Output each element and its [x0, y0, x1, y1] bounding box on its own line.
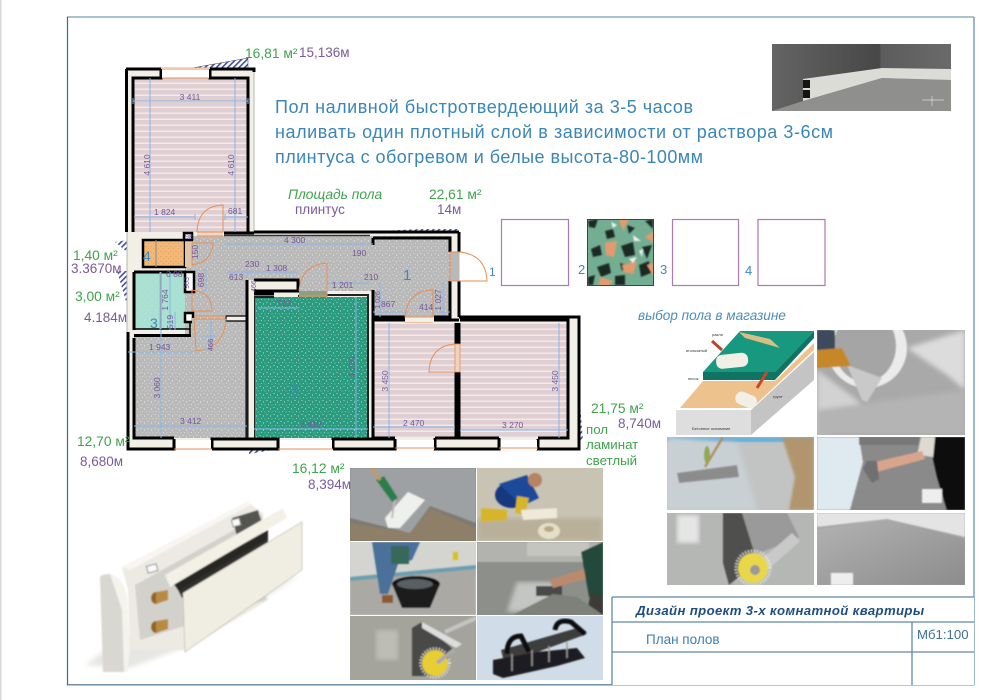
photo: finished floor	[817, 513, 965, 585]
photo: spiked shoes	[477, 616, 603, 680]
dimension labels: 4 270	[347, 356, 357, 378]
dimension labels: 210	[364, 272, 378, 282]
area and skirting labels: 14м	[437, 202, 461, 217]
dimension labels: 6 88	[166, 269, 183, 279]
swatch numbers	[578, 262, 752, 278]
room numbers: 4	[143, 248, 151, 264]
area and skirting labels	[71, 45, 661, 492]
room numbers	[143, 248, 496, 400]
scale: Мб1:100	[917, 627, 969, 642]
room numbers: 1	[489, 265, 496, 279]
title block	[612, 597, 974, 685]
dimension labels: 3 412	[180, 416, 202, 426]
photo: roller on screed	[350, 616, 476, 680]
dimension labels: 613	[229, 272, 243, 282]
area and skirting labels: 3.3670м	[71, 261, 122, 276]
dimension labels: 963	[184, 277, 191, 289]
dimension labels: 519	[165, 315, 175, 329]
wall envelope	[127, 68, 579, 449]
room 4: orange toilet	[143, 205, 223, 267]
dimension labels: 4 610	[226, 154, 236, 176]
photo: pouring bucket	[817, 330, 965, 435]
room: top bedroom	[126, 68, 254, 232]
dimension labels: 3 450	[380, 370, 390, 392]
dimension labels: 713	[277, 298, 291, 308]
dimension labels: 681	[228, 206, 242, 216]
page edge strip	[0, 0, 2, 700]
project title: Дизайн проект 3-х комнатной квартиры	[635, 603, 925, 618]
area and skirting labels: 8,740м	[618, 416, 661, 431]
photo: floor layers diagram: ракля	[712, 332, 723, 337]
floor swatches	[502, 219, 825, 286]
dimension labels: 698	[196, 273, 206, 287]
photo: floor layers diagram: грунт	[773, 394, 783, 399]
area and skirting labels: 21,75 м²	[591, 401, 644, 416]
photo: worker with damper tape	[477, 468, 603, 541]
area and skirting labels: светлый	[586, 453, 637, 468]
rooms: lower-right laminate bedrooms	[333, 317, 579, 449]
dimension labels: 466	[206, 339, 215, 351]
dimension labels	[142, 92, 560, 430]
photo grid: levelling floor steps bottom	[350, 468, 603, 680]
area and skirting labels: 3,00 м²	[75, 289, 120, 304]
swatch 2: terrazzo	[587, 219, 654, 286]
area and skirting labels: плинтус	[295, 202, 345, 217]
balcony hatches	[115, 58, 583, 454]
photo: spiked roller	[667, 513, 814, 585]
dimension labels: 2 470	[403, 418, 425, 428]
windows	[174, 440, 538, 450]
main notes text: наливать один плотный слой в зависимости от раствора 3-6см	[275, 122, 833, 142]
dimension labels: 1 026	[375, 291, 382, 309]
swatch 3	[672, 220, 738, 286]
main notes text: плинтуса с обогревом и белые высота-80-100мм	[275, 147, 703, 167]
dimension labels: 1 943	[149, 342, 171, 352]
shop selection caption: выбор пола в магазине	[638, 308, 786, 323]
area and skirting labels: 16,12 м²	[292, 461, 345, 476]
swatch numbers: 3	[660, 262, 667, 277]
dimension labels: 4 300	[284, 235, 306, 245]
photo: floor layers diagram: песок	[688, 376, 699, 381]
photo: primer roller	[350, 468, 476, 541]
area and skirting labels: 8,394м	[308, 477, 351, 492]
room numbers: 1	[403, 267, 411, 284]
photo: mixing in bucket	[350, 542, 476, 615]
area and skirting labels: 16,81 м²	[245, 46, 298, 61]
dimension labels: 1 027	[433, 289, 443, 311]
area and skirting labels: Площадь пола	[288, 187, 382, 202]
dimension labels: 1 764	[160, 289, 170, 311]
area and skirting labels: 12,70 м²	[77, 434, 130, 449]
room: corridor and room 1 floor	[185, 232, 487, 338]
dimension labels: 3 410	[300, 419, 322, 429]
main notes text: Пол наливной быстротвердеющий за 3-5 часов	[275, 97, 693, 117]
room numbers: 3	[150, 315, 158, 331]
dimension labels: 1 824	[154, 207, 176, 217]
photo: spatula on wet floor	[477, 542, 603, 615]
area and skirting labels: 8,680м	[80, 454, 123, 469]
photo grid: levelling floor steps right	[667, 308, 965, 585]
dimension labels: 867	[381, 299, 395, 309]
photo: hand with spatula	[817, 437, 965, 510]
room numbers: 2	[291, 383, 299, 400]
dimension labels: 230	[245, 259, 259, 269]
dimension labels: 3 450	[550, 370, 560, 392]
photo: squeegee on floor	[667, 437, 814, 510]
photo: skirting heater	[85, 502, 302, 672]
photo: floor layers diagram: игольчатый	[686, 348, 707, 353]
dimension labels: 1 308	[266, 263, 288, 273]
photo: floor layers diagram: Бетонное основание	[692, 426, 731, 431]
dimension labels: 1 201	[332, 280, 354, 290]
main notes text	[275, 97, 833, 167]
room: lower-left living area	[128, 280, 278, 449]
dimension labels: 3 060	[152, 377, 162, 399]
sheet name: План полов	[646, 632, 720, 647]
room 3: teal bathroom	[133, 272, 212, 336]
dimension labels: 3 270	[502, 420, 524, 430]
photo: skirting board	[772, 44, 951, 111]
swatch 4	[758, 220, 825, 286]
dimension labels: 4 610	[142, 154, 152, 176]
dimension labels: 3 411	[180, 92, 201, 102]
area and skirting labels: пол	[586, 422, 608, 437]
swatch numbers: 4	[745, 263, 752, 278]
swatch 1	[502, 220, 568, 286]
dimension lines	[128, 78, 568, 438]
dimension labels: 98	[185, 234, 193, 241]
photo: floor layers diagram	[676, 331, 814, 435]
dimension labels: 466	[251, 280, 258, 292]
area and skirting labels: 22,61 м²	[429, 187, 482, 202]
dimension labels: 150	[190, 245, 200, 259]
dimension labels: 414	[419, 302, 433, 312]
swatch numbers: 2	[578, 262, 585, 277]
floor plan	[115, 58, 583, 454]
area and skirting labels: 4.184м	[84, 310, 127, 325]
area and skirting labels: ламинат	[586, 437, 638, 452]
dimension labels: 190	[352, 248, 366, 258]
area and skirting labels: 15,136м	[299, 45, 350, 60]
area and skirting labels: 1,40 м²	[73, 248, 118, 263]
room 2: green floor	[247, 263, 368, 439]
